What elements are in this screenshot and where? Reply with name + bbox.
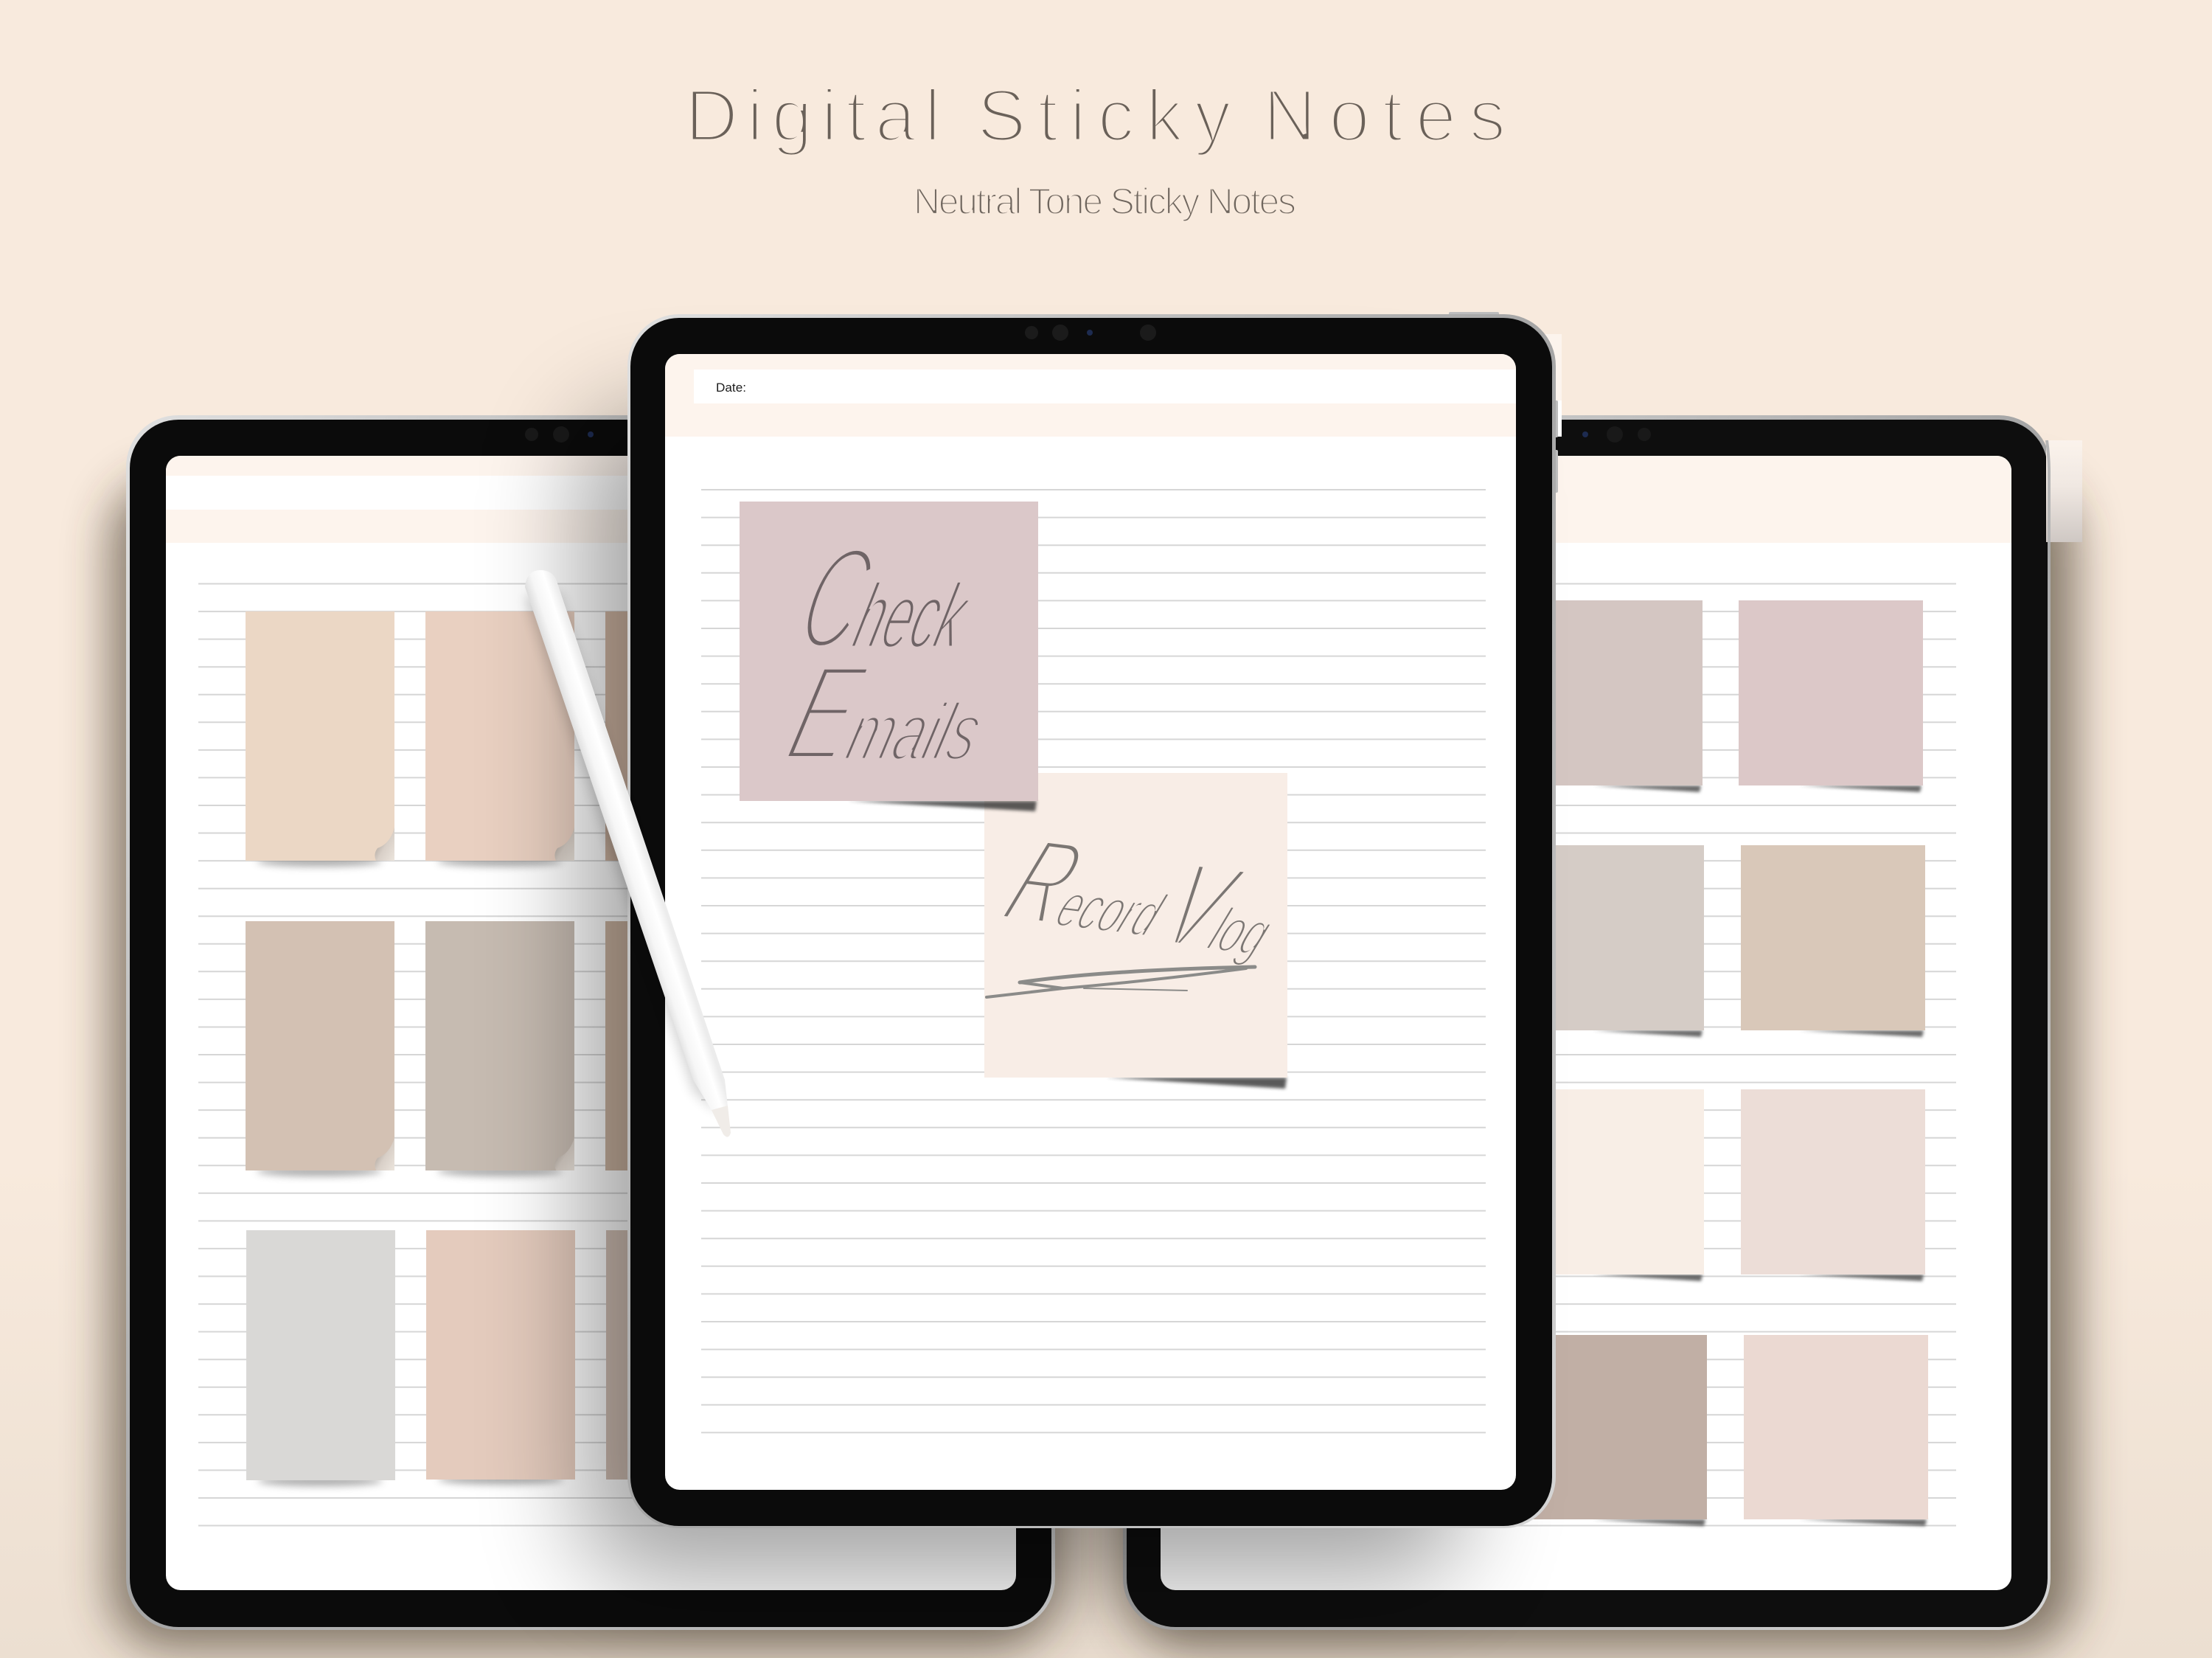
sticky note: left r3c2 [426, 1230, 575, 1485]
sticky note: left r3c3 [606, 1230, 755, 1480]
center tablet camera [1025, 325, 1156, 341]
title: Sticky [977, 74, 1242, 157]
side buttons [1449, 312, 1558, 493]
scribble underline [987, 967, 1255, 997]
right tablet [1123, 415, 2051, 1630]
handwriting: record: Record [987, 814, 1198, 962]
sticky note: left r2c2 [425, 921, 574, 1176]
sticky note: right r1c1 [1517, 600, 1703, 792]
sticky note: left r1c1 [246, 611, 394, 867]
apple pencil [525, 570, 731, 1137]
sticky note: check emails [740, 502, 1038, 811]
left tablet screen [166, 456, 1016, 1590]
cream artefact beside center tablet [1541, 334, 1562, 437]
tablet shadow: right [1128, 479, 2076, 1648]
left tablet [126, 415, 1055, 1630]
sticky note: right r4c1 [1522, 1335, 1707, 1526]
right tablet frame [1123, 415, 2051, 1630]
pencil tip [712, 1106, 731, 1137]
handwriting: vlog: Vlog [1143, 838, 1306, 979]
subtitle: Neutral Tone Sticky Notes [914, 181, 1296, 222]
sticky note: right r3c1 [1519, 1089, 1704, 1281]
ruled lines [701, 490, 1486, 1432]
left tablet frame [126, 415, 1055, 1630]
sticky note: right r1c2 [1739, 600, 1923, 792]
center tablet shadow [582, 413, 1460, 1578]
sticky note: right r3c2 [1741, 1089, 1925, 1281]
title: Notes [1263, 74, 1518, 157]
cream artefact behind right tablet edge [2046, 440, 2082, 542]
center tablet screen [665, 354, 1516, 1490]
sticky note: left r3c1 [246, 1230, 395, 1486]
sticky note: right r2c1 [1519, 845, 1704, 1037]
center tablet [627, 312, 1558, 1528]
sticky note: right r4c2 [1744, 1335, 1928, 1526]
sticky note: right r2c2 [1741, 845, 1925, 1037]
title: Digital [685, 74, 949, 157]
handwriting: emails: Emails [773, 637, 1006, 789]
pencil body [525, 570, 728, 1110]
date label: Date: [716, 381, 746, 395]
sticky note: record vlog [984, 773, 1306, 1089]
right tablet edge over artefact [2045, 440, 2051, 542]
handwriting: check: Check [785, 518, 995, 679]
sticky note: left r1c3 [605, 611, 754, 861]
sticky note: left r1c2 [425, 611, 574, 867]
right tablet screen [1161, 456, 2011, 1590]
tablet shadow: left [111, 479, 1054, 1648]
left tablet camera [525, 426, 594, 443]
sticky note: left r2c3 [605, 921, 754, 1170]
center tablet frame [627, 314, 1556, 1528]
sticky note: left r2c1 [246, 921, 394, 1176]
right tablet camera [1582, 426, 1651, 443]
